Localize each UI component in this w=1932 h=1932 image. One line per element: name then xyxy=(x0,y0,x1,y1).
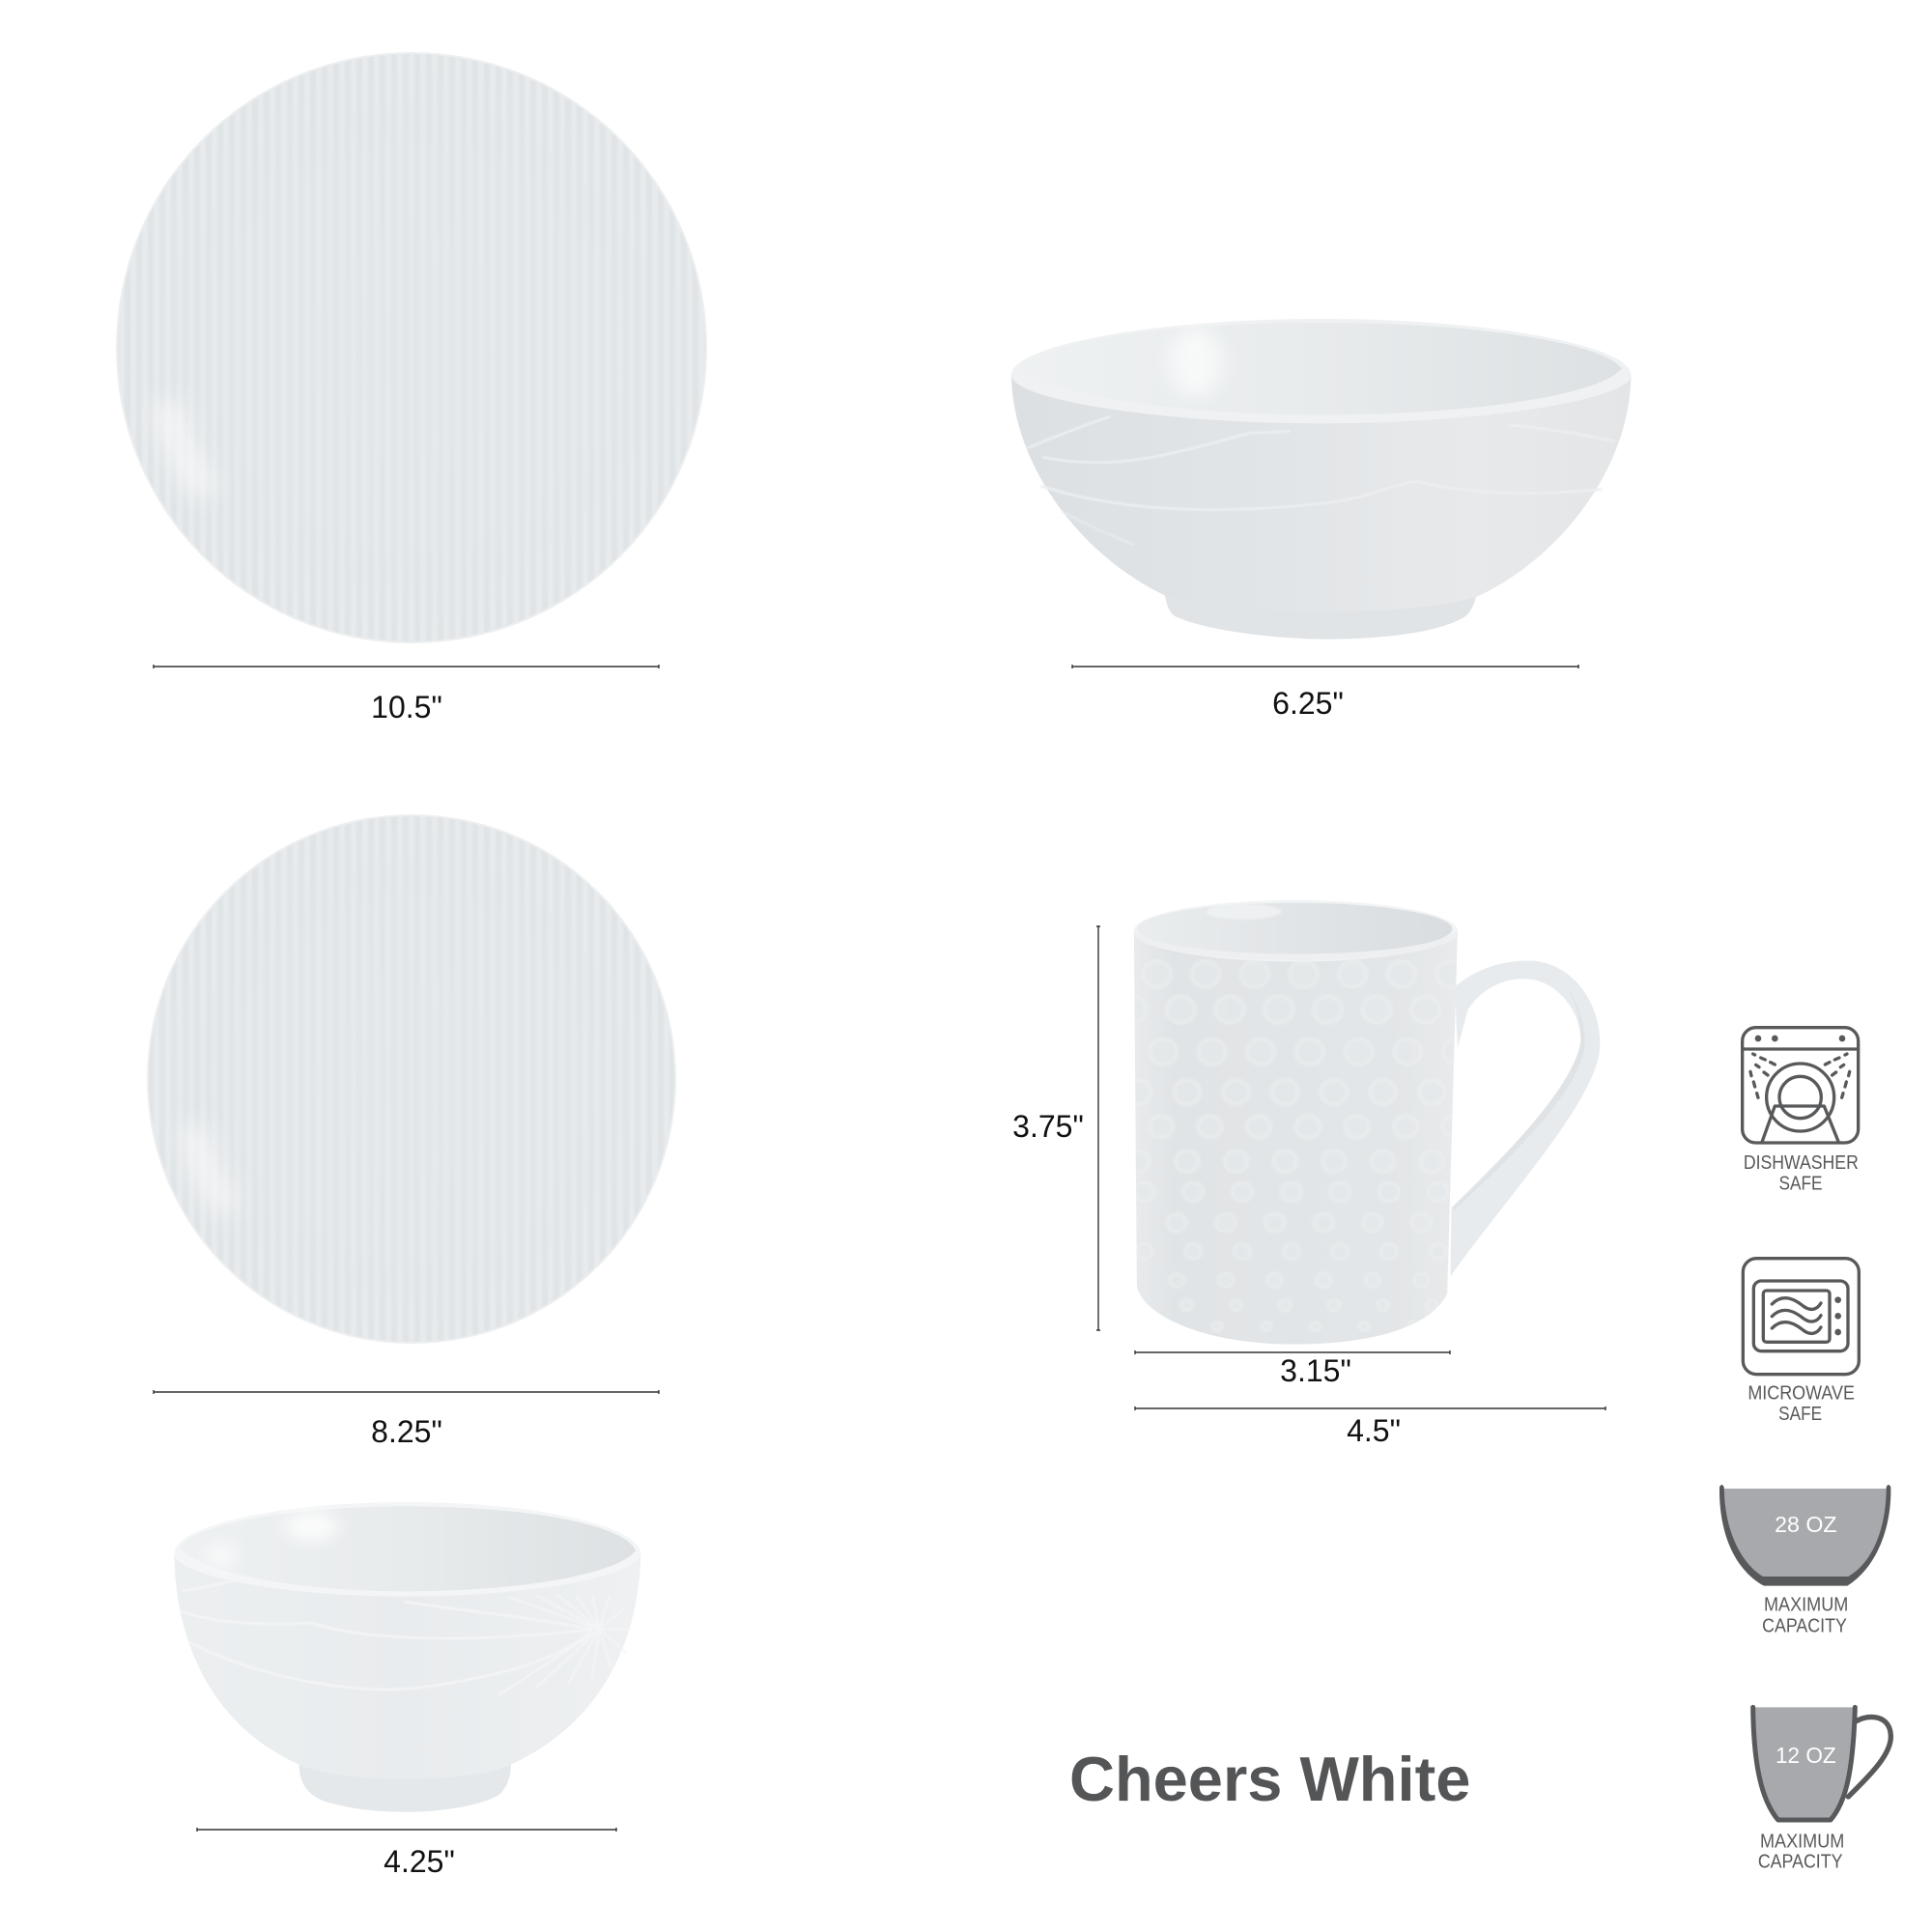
dimension: mug width 4.5 inch: 4.5" xyxy=(1347,1413,1401,1448)
dimension: mug width 4.5 inch xyxy=(1135,1406,1605,1448)
large serving bowl xyxy=(1011,319,1631,639)
icon: mug capacity 12 oz xyxy=(1753,1707,1890,1820)
label: mug maximum capacity: MAXIMUM xyxy=(1760,1831,1844,1852)
icon: bowl capacity 28 oz xyxy=(1719,1485,1890,1586)
dimension: mug diameter 3.15 inch xyxy=(1135,1350,1450,1388)
label: mug maximum capacity: CAPACITY xyxy=(1758,1851,1842,1872)
label: microwave safe: MICROWAVE xyxy=(1747,1382,1855,1404)
icon: microwave safe xyxy=(1743,1259,1859,1375)
label: dishwasher safe xyxy=(1744,1152,1859,1194)
dimension: mug height 3.75 inch: 3.75" xyxy=(1012,1109,1084,1144)
small rice bowl xyxy=(175,1502,640,1812)
label: bowl maximum capacity xyxy=(1762,1595,1848,1636)
icon: bowl capacity 28 oz: 28 OZ xyxy=(1775,1512,1836,1537)
label: bowl maximum capacity: CAPACITY xyxy=(1762,1615,1847,1636)
dimension: mug diameter 3.15 inch: 3.15" xyxy=(1280,1353,1351,1388)
dimension: rice bowl 4.25 inch xyxy=(197,1828,616,1879)
dimension: dinner plate 10.5 inch xyxy=(154,665,659,724)
dimension: serving bowl 6.25 inch xyxy=(1072,665,1578,721)
dimension: rice bowl 4.25 inch: 4.25" xyxy=(384,1844,455,1879)
icon: mug capacity 12 oz: 12 OZ xyxy=(1776,1743,1836,1768)
title: Cheers White xyxy=(1069,1744,1470,1814)
salad plate xyxy=(135,802,688,1354)
label: dishwasher safe: SAFE xyxy=(1778,1173,1822,1194)
dimension: salad plate 8.25 inch xyxy=(154,1390,659,1449)
large dinner plate xyxy=(106,43,717,653)
dimension: dinner plate 10.5 inch: 10.5" xyxy=(371,690,442,724)
label: mug maximum capacity xyxy=(1758,1831,1844,1872)
label: bowl maximum capacity: MAXIMUM xyxy=(1764,1595,1848,1616)
label: microwave safe xyxy=(1747,1382,1855,1425)
label: microwave safe: SAFE xyxy=(1778,1404,1822,1425)
icon: dishwasher safe xyxy=(1743,1028,1859,1143)
dimension: mug height 3.75 inch xyxy=(1012,926,1100,1330)
label: dishwasher safe: DISHWASHER xyxy=(1744,1152,1859,1174)
dimension: serving bowl 6.25 inch: 6.25" xyxy=(1272,686,1344,721)
mug with dotted pattern xyxy=(1120,900,1600,1345)
dimension: salad plate 8.25 inch: 8.25" xyxy=(371,1414,442,1449)
